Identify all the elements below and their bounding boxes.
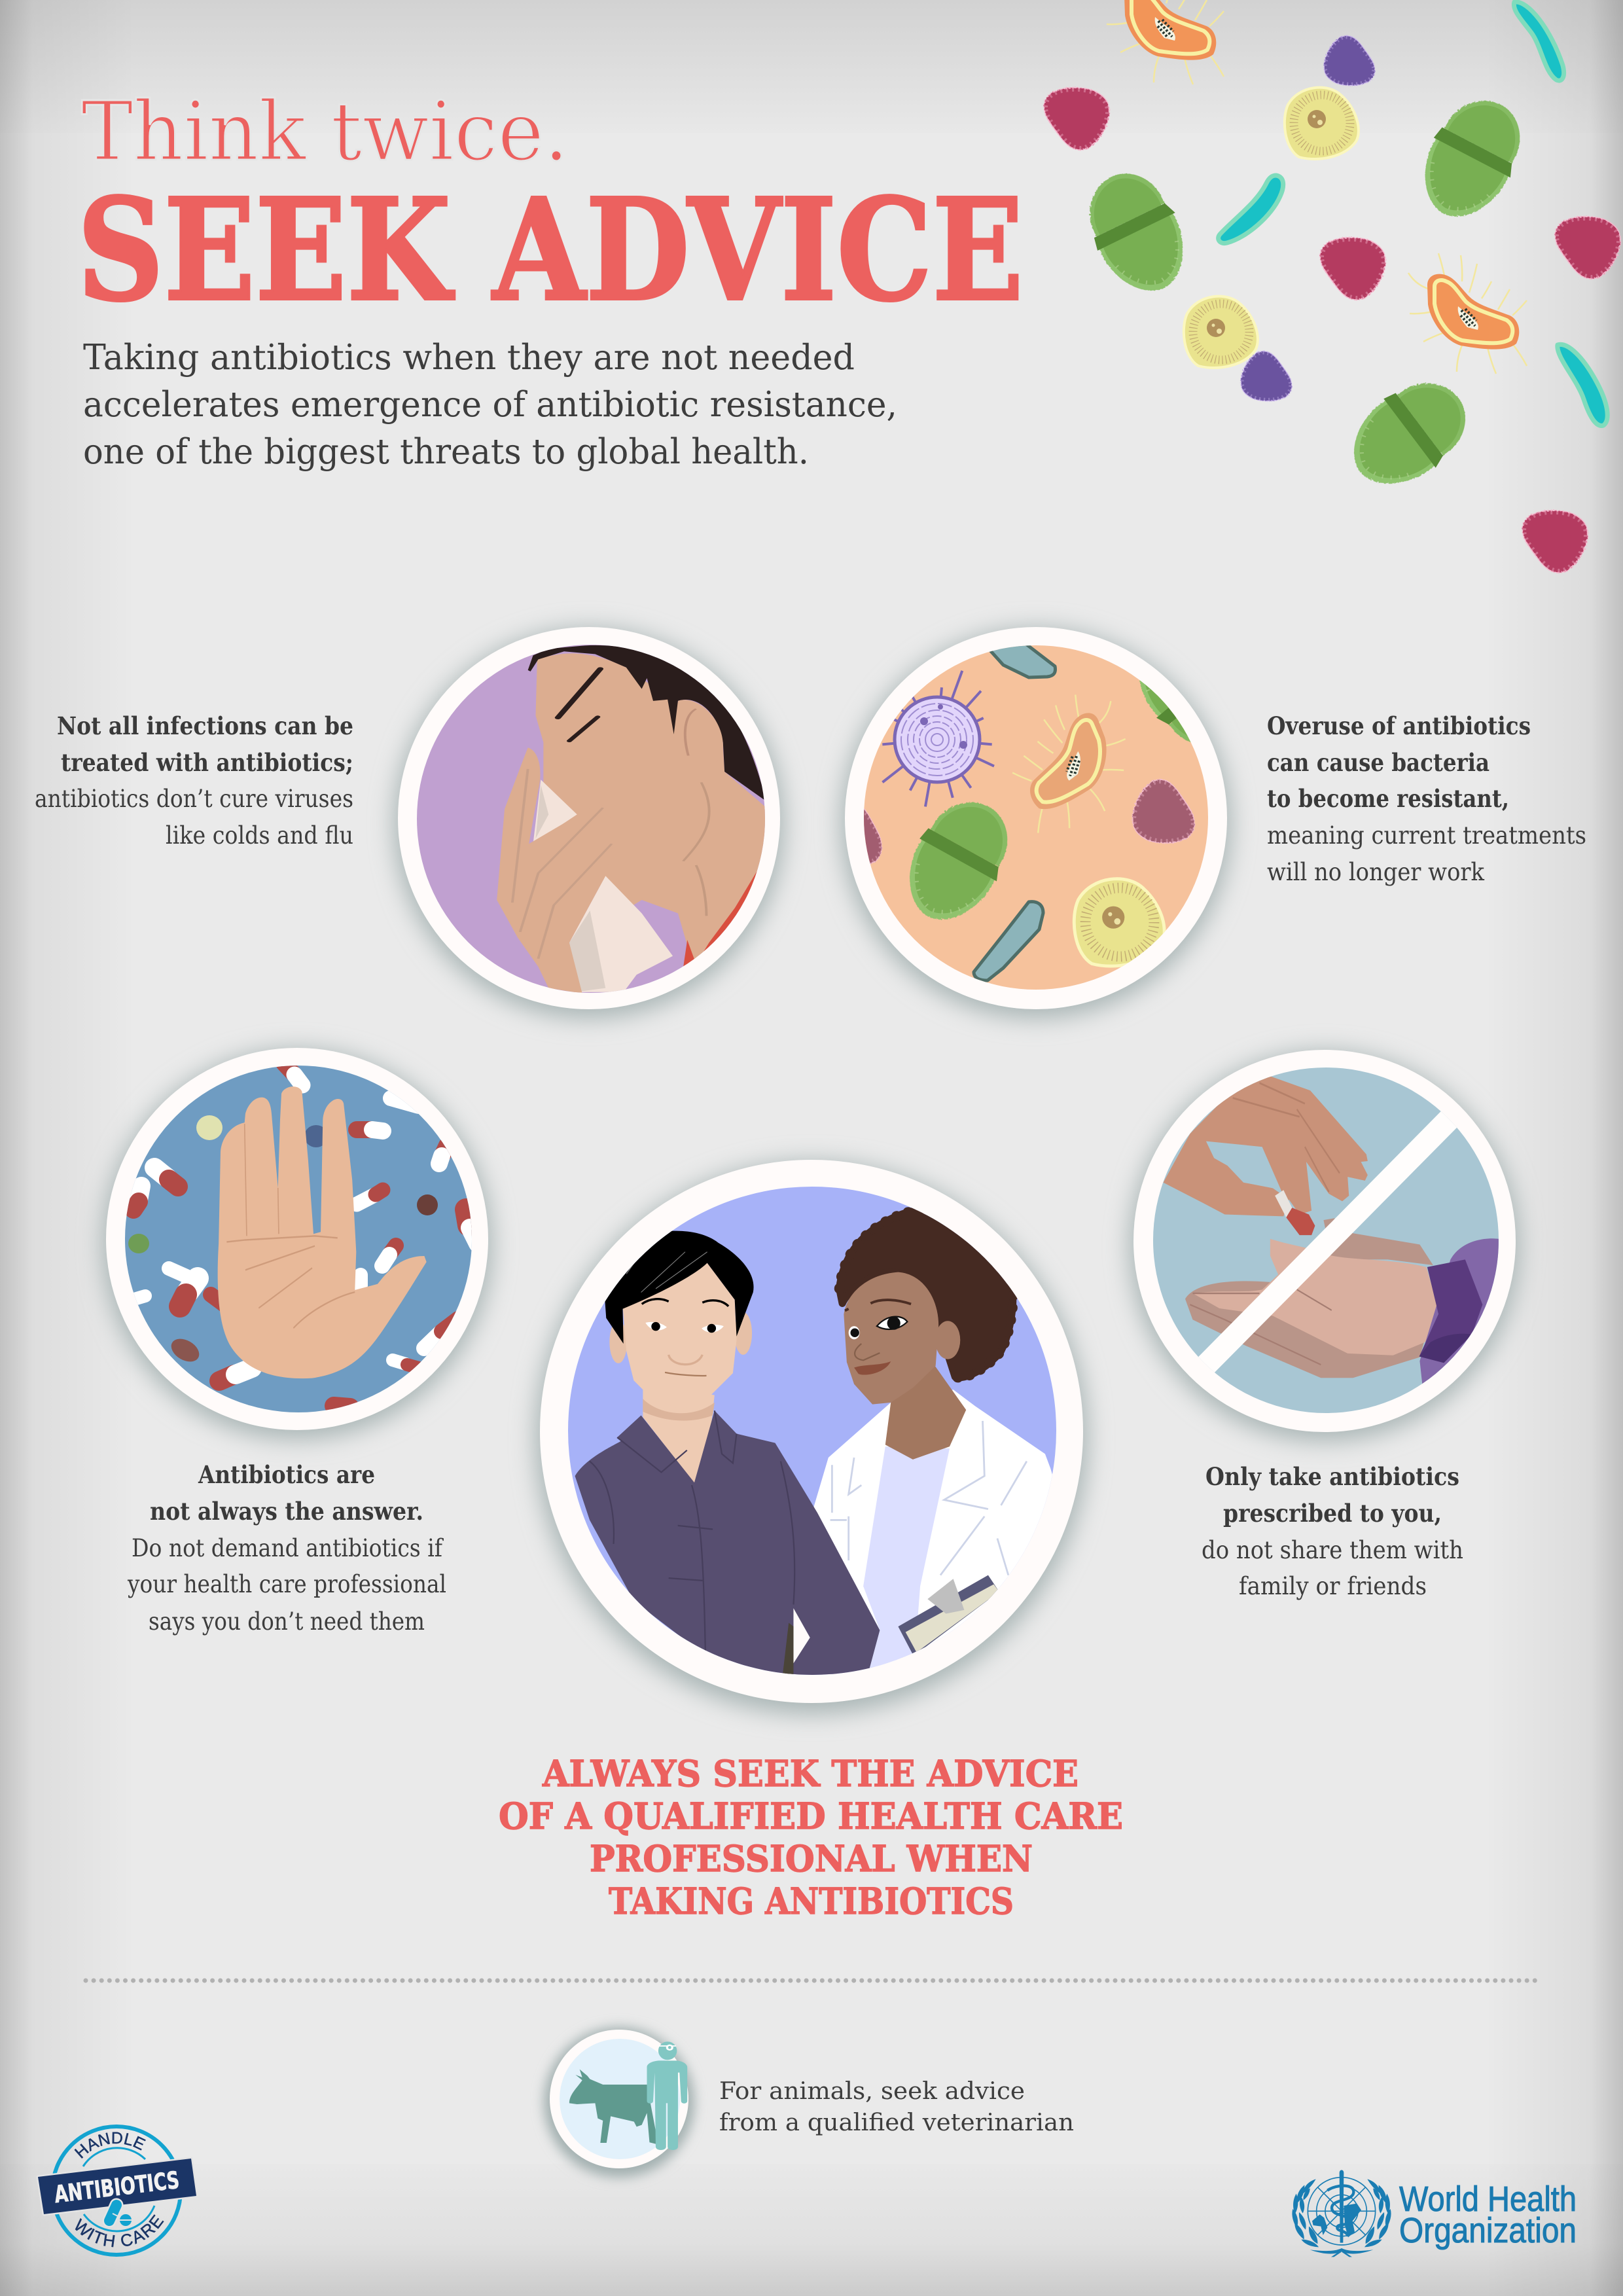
caption: overuse of antibiotics: to become resistant, [1267,784,1509,813]
icon: green dividing bacteria [1071,84,1538,506]
panel: patient and health professional [535,1160,1088,1714]
man: neck [643,1380,715,1483]
caption: overuse of antibiotics: meaning current treatments [1267,821,1586,850]
skin: head and neck [535,653,776,967]
doctor: t-shirt [863,1446,950,1681]
capsules [134,1064,478,1407]
orange bacterium [994,683,1150,840]
caption: not all infections: treated with antibiotics; [61,748,353,777]
clipboard [898,1575,999,1656]
man: shirt [575,1410,880,1681]
tissue [533,780,673,992]
panel: do not share antibiotics [1130,1050,1520,1441]
icon: yellow cells [1184,88,1359,368]
doctor: hair [840,1209,1013,1378]
text: for animals [719,2078,1074,2136]
text: for animals: For animals, seek advice [719,2078,1025,2105]
badge: handle antibiotics with care [37,2125,196,2257]
doctor: face [844,1272,938,1405]
text: for animals: from a qualified veterinarian [719,2109,1074,2136]
intro text block: accelerates emergence of antibiotic resistance, [83,385,897,425]
caption: not always the answer: says you don’t need them [149,1607,425,1636]
caption: overuse of antibiotics: Overuse of antibiotics [1267,711,1531,740]
receiving hand: palm [1192,1239,1440,1355]
caption: only take antibiotics prescribed: do not share them with [1202,1536,1463,1564]
badge: handle antibiotics with care: HANDLE [75,2132,146,2159]
heading: always seek the advice: TAKING ANTIBIOTICS [609,1880,1014,1922]
sleeve [1419,1238,1499,1386]
doctor: neck [885,1366,966,1460]
icon: purple bacteria [1241,36,1375,401]
caption: overuse of antibiotics [1267,711,1586,886]
badge: handle antibiotics with care: WITH CARE [75,2214,164,2248]
heading: SEEK ADVICE: SEEK ADVICE [77,168,1024,332]
icon: teal rods [1219,2,1607,425]
heading: always seek the advice: PROFESSIONAL WHEN [590,1837,1033,1880]
capsule [1275,1190,1292,1217]
emblem [1292,2170,1391,2257]
veterinarian [658,2041,677,2060]
intro text block [83,338,897,472]
heading: always seek the advice: ALWAYS SEEK THE ADVICE [542,1752,1079,1795]
yellow cell [1074,879,1164,966]
icon: vet and cow [544,2027,694,2178]
panel: sneezing man [394,627,784,1018]
hair [528,645,766,801]
title: Think twice.: Think twice. [81,84,569,179]
receiving hand: back fingers [1323,1218,1433,1265]
icon: orange bacteria [1105,0,1527,374]
man: hair [604,1231,754,1344]
decorative bacteria cluster [1044,0,1620,573]
heading: always seek the advice [499,1752,1123,1922]
cow [569,2070,658,2145]
caption: not all infections [35,711,353,850]
caption: overuse of antibiotics: will no longer work [1267,858,1485,886]
giving hand [1164,1076,1368,1216]
caption: only take antibiotics prescribed: Only take antibiotics [1205,1462,1459,1491]
rods [974,638,1055,980]
wordmark: World Health [1399,2179,1577,2219]
virus [882,671,994,806]
hand [497,747,613,994]
maroon bacteria [1132,780,1195,843]
caption: overuse of antibiotics: can cause bacteria [1267,748,1489,777]
intro text block: Taking antibiotics when they are not needed [83,338,855,378]
caption: not always the answer: your health care professional [127,1570,446,1598]
icon: raspberry bacteria [1044,88,1620,573]
caption: not always the answer [127,1460,446,1636]
caption: not all infections: like colds and flu [166,821,353,850]
logo: World Health Organization: Organization [1399,2211,1577,2250]
logo: World Health Organization [1292,2170,1577,2257]
man: face details [642,1299,728,1306]
doctor: coat [813,1390,1063,1685]
caption: only take antibiotics prescribed [1202,1462,1463,1600]
caption: not all infections: antibiotics don’t cure viruses [35,785,353,813]
tablets [196,1115,223,1140]
caption: not always the answer: Antibiotics are [198,1460,375,1489]
man: face [623,1263,736,1410]
heading: always seek the advice: OF A QUALIFIED HEALTH CARE [499,1795,1123,1837]
prohibition slash [1198,1111,1457,1373]
caption: only take antibiotics prescribed: prescribed to you, [1223,1499,1442,1528]
caption: not always the answer: not always the answer. [150,1497,423,1526]
panel: stop hand and pills [102,1048,492,1439]
caption: only take antibiotics prescribed: family or friends [1239,1572,1427,1600]
intro text block: one of the biggest threats to global health. [83,432,809,472]
green bacteria [889,785,1026,937]
badge: handle antibiotics with care: ANTIBIOTICS [53,2167,181,2208]
hand [218,1086,427,1378]
shirt [683,870,757,966]
caption: not all infections: Not all infections can be [57,711,353,740]
caption: not always the answer: Do not demand antibiotics if [132,1534,444,1562]
man: ear left and right [609,1321,627,1363]
panel: bacteria under the microscope [832,614,1261,1018]
